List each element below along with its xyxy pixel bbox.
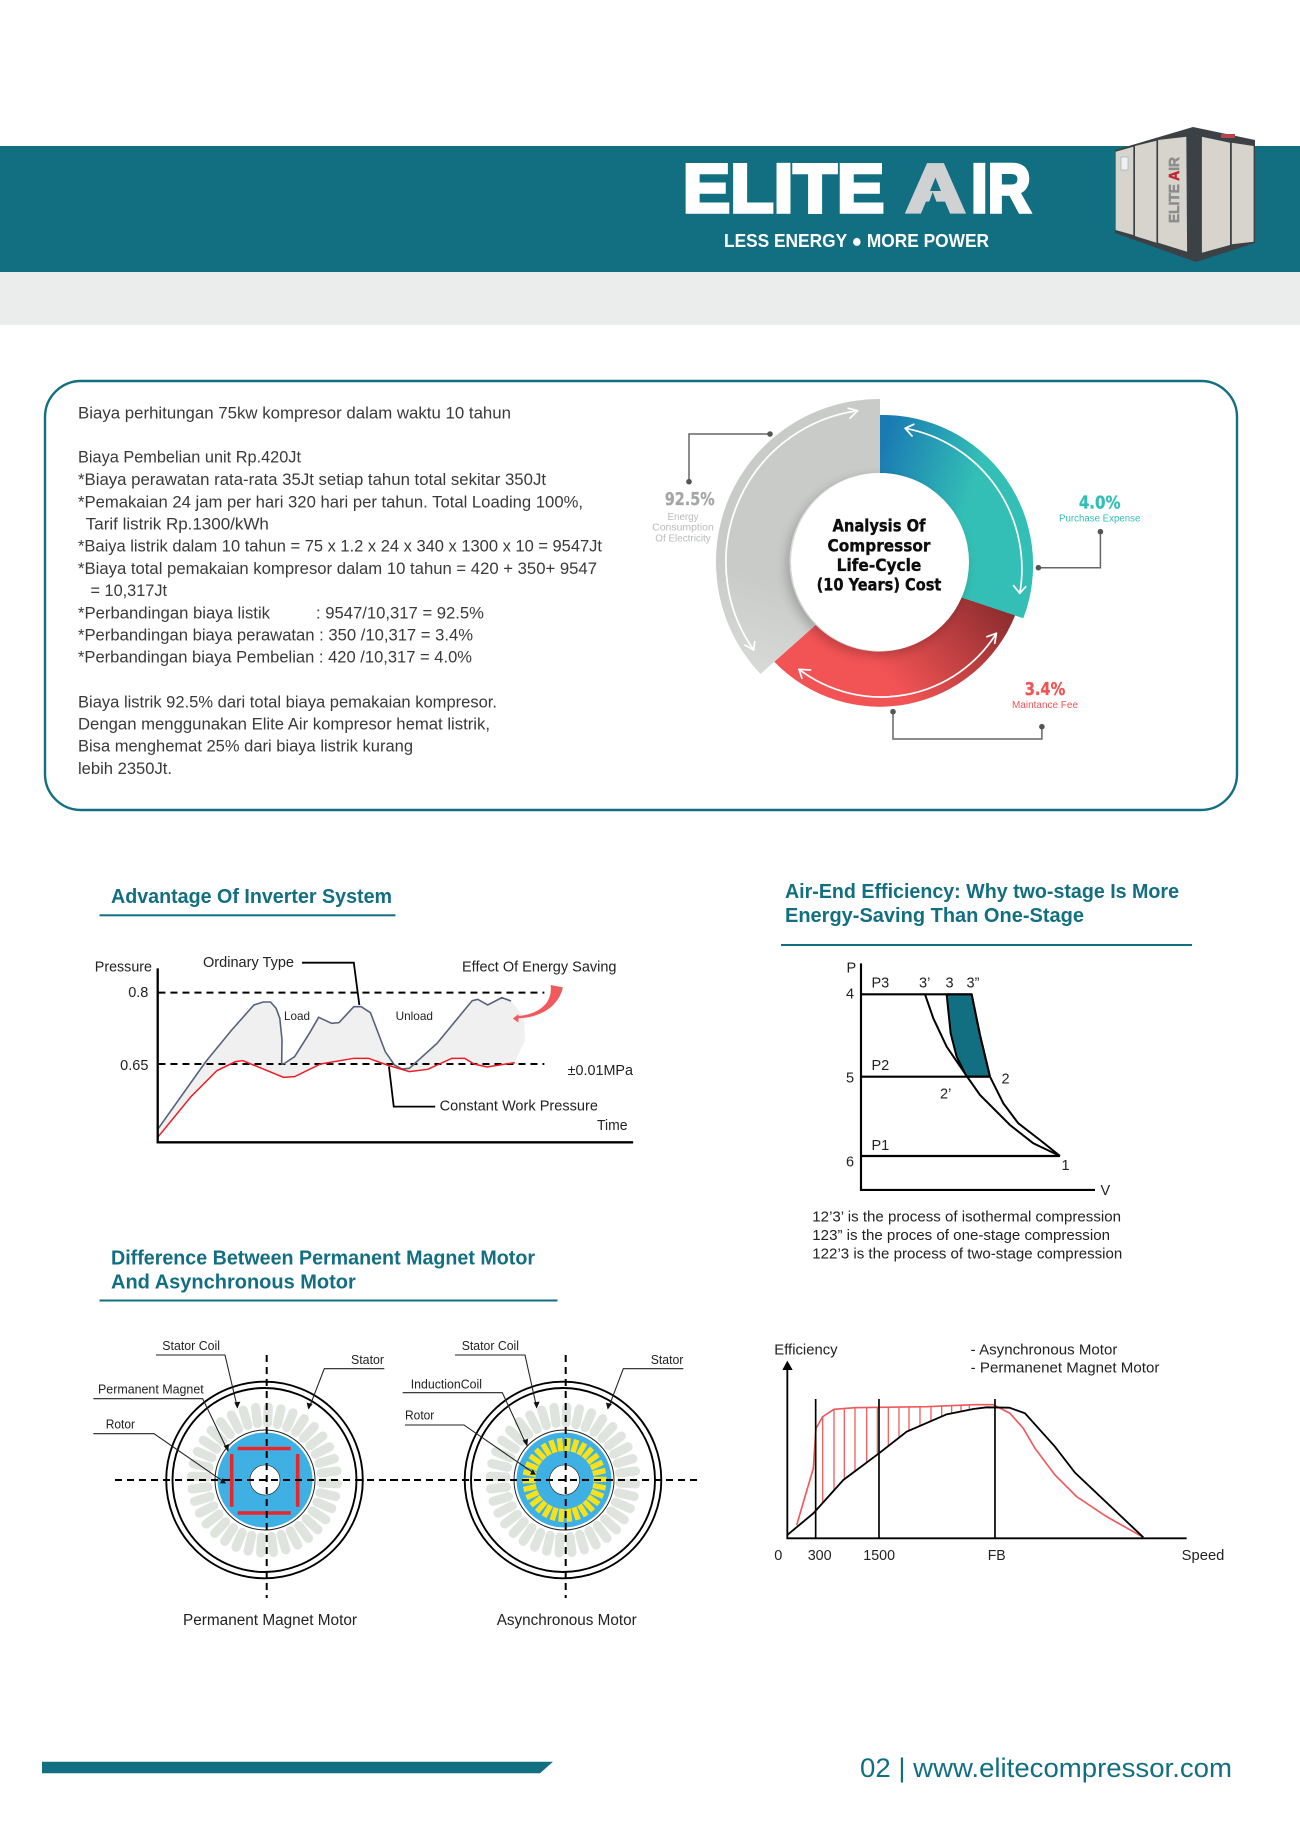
chart labels: Constant Work Pressure — [440, 1099, 598, 1115]
callout: electricity: 92.5% — [665, 489, 715, 510]
labels: Stator Coil — [462, 1338, 519, 1353]
leader lines — [93, 1355, 384, 1483]
labels: Rotor — [405, 1407, 435, 1422]
labels: InductionCoil — [411, 1376, 482, 1391]
diagram labels: 3’ — [919, 976, 930, 992]
chart labels — [95, 955, 634, 1134]
diagram labels: 4 — [846, 986, 854, 1002]
chart labels: Speed — [1182, 1548, 1224, 1564]
stator coils — [486, 1403, 640, 1557]
diagram labels: 6 — [846, 1154, 854, 1170]
diagram labels: 3” — [966, 976, 980, 992]
diagram notes — [812, 1210, 1122, 1262]
teal band — [0, 146, 1300, 272]
text block: cost calculation: *Perbandingan biaya listik — [78, 604, 271, 622]
diagram notes: 12’3’ is the process of isothermal compression — [812, 1210, 1121, 1226]
diagram labels: 2 — [1002, 1072, 1010, 1088]
callout: purchase — [1036, 492, 1141, 570]
chart labels: FB — [988, 1548, 1006, 1564]
header banner — [0, 127, 1300, 325]
text block: cost calculation — [78, 404, 603, 778]
chart labels: Time — [597, 1118, 628, 1134]
text block: cost calculation: *Pemakaian 24 jam per hari 320 hari per tahun. Total Loading 100%, — [78, 493, 583, 511]
center title: Compressor — [828, 537, 931, 556]
induction coil bars — [519, 1435, 610, 1525]
logo: Elite Air — [683, 150, 1031, 227]
segment: maintenance — [774, 597, 1015, 707]
heading: air-end efficiency — [781, 881, 1192, 946]
chart labels — [774, 1342, 1224, 1564]
stator rings — [166, 1382, 363, 1578]
callout: purchase: Purchase Expense — [1059, 514, 1141, 525]
heading: motor difference: Difference Between Permanent Magnet Motor — [111, 1248, 535, 1270]
callout: electricity: Consumption — [652, 523, 714, 534]
text block: cost calculation: Dengan menggunakan Elite Air kompresor hemat listrik, — [78, 715, 490, 733]
caption: Asynchronous Motor — [497, 1612, 637, 1629]
permanent magnets — [232, 1448, 298, 1513]
diagram: asynchronous motor — [390, 1338, 698, 1629]
hatch and curves — [782, 1361, 1187, 1538]
chart labels: Efficiency — [774, 1342, 838, 1358]
text block: cost calculation: lebih 2350Jt. — [78, 760, 172, 778]
callout: electricity: Energy — [668, 512, 698, 523]
center title: Life-Cycle — [837, 556, 921, 575]
chart labels: Effect Of Energy Saving — [462, 960, 616, 976]
diagram: permanent magnet motor — [93, 1338, 413, 1629]
rotor — [215, 1430, 315, 1530]
diagram notes: 123” is the proces of one-stage compression — [812, 1228, 1110, 1244]
segment: purchase — [880, 415, 1033, 618]
text block: cost calculation: = 10,317Jt — [90, 582, 167, 600]
tagline: LESS ENERGY ● MORE POWER — [724, 230, 989, 251]
text block: cost calculation: Biaya perhitungan 75kw kompresor dalam waktu 10 tahun — [78, 404, 511, 422]
diagram labels: P1 — [872, 1138, 889, 1154]
diagram labels — [846, 960, 1110, 1199]
plot curves — [158, 963, 633, 1142]
text block: cost calculation: *Biaya perawatan rata-rata 35Jt setiap tahun total sekitar 350Jt — [78, 471, 547, 489]
labels — [405, 1338, 684, 1422]
callout: purchase: 4.0% — [1079, 492, 1121, 513]
grey strip — [0, 272, 1300, 325]
text block: cost calculation: *Perbandingan biaya perawatan : 350 /10,317 = 3.4% — [78, 627, 473, 645]
chart labels: Unload — [396, 1009, 433, 1023]
diagram labels: P — [846, 960, 856, 976]
chart labels: 1500 — [863, 1548, 895, 1564]
labels: Stator — [351, 1352, 385, 1367]
diagram labels: P3 — [872, 976, 889, 992]
diagram labels: P2 — [872, 1058, 889, 1074]
stator rings — [465, 1382, 661, 1578]
rotor — [514, 1430, 614, 1530]
heading: motor difference — [100, 1248, 558, 1302]
chart labels: - Asynchronous Motor — [971, 1342, 1118, 1358]
center title: Analysis Of — [832, 517, 926, 536]
footer — [42, 1753, 1232, 1783]
callout: maintenance: 3.4% — [1025, 679, 1065, 700]
stator coils — [188, 1403, 341, 1557]
text block: cost calculation: Bisa menghemat 25% dari biaya listrik kurang — [78, 738, 413, 756]
logo: Elite Air: ELITE — [683, 150, 884, 227]
callout: maintenance — [890, 679, 1078, 739]
footer bar — [42, 1762, 553, 1773]
panel: life-cycle cost — [45, 381, 1237, 810]
center title: (10 Years) Cost — [817, 576, 941, 595]
chart: P-V diagram — [812, 960, 1122, 1262]
callout: electricity — [652, 431, 773, 545]
center circle — [791, 473, 969, 651]
heading: inverter system: Advantage Of Inverter System — [111, 886, 392, 908]
callout: electricity: Of Electricity — [655, 534, 711, 545]
center shadow — [786, 476, 966, 656]
labels: Stator — [651, 1352, 684, 1367]
labels: Rotor — [106, 1416, 136, 1431]
logo: Elite Air: A — [906, 150, 966, 227]
text block: cost calculation: : 9547/10,317 = 92.5% — [316, 604, 484, 622]
chart labels: 0 — [774, 1548, 782, 1564]
text block: cost calculation: *Biaya total pemakaian kompresor dalam 10 tahun = 420 + 350+ 9547 — [78, 560, 597, 578]
white arc arrows — [726, 408, 1026, 697]
icon: compressor cabinet — [1115, 127, 1255, 262]
chart labels: Ordinary Type — [203, 955, 294, 971]
labels — [98, 1338, 385, 1431]
caption: Permanent Magnet Motor — [183, 1612, 357, 1629]
text block: cost calculation: Tarif listrik Rp.1300/kWh — [86, 515, 269, 533]
chart: efficiency vs speed — [774, 1342, 1224, 1564]
panel border — [45, 381, 1237, 810]
icon: compressor cabinet: ELITE AIR — [1166, 157, 1183, 223]
segment: electricity — [716, 399, 880, 674]
diagram lines — [861, 963, 1095, 1190]
chart labels: 0.65 — [120, 1058, 148, 1074]
diagram labels: 2’ — [940, 1086, 951, 1102]
heading: air-end efficiency: Energy-Saving Than One-Stage — [785, 905, 1084, 927]
callout: maintenance: Maintance Fee — [1012, 700, 1078, 711]
centre axes — [115, 1355, 413, 1598]
diagram labels: 5 — [846, 1070, 854, 1086]
diagram labels: 1 — [1062, 1158, 1070, 1174]
centre axes — [390, 1355, 698, 1598]
text block: cost calculation: Biaya listrik 92.5% dari total biaya pemakaian kompresor. — [78, 693, 497, 711]
chart labels: Pressure — [95, 960, 152, 976]
center title — [817, 517, 941, 595]
diagram labels: 3 — [946, 976, 954, 992]
text block: cost calculation: Biaya Pembelian unit Rp.420Jt — [78, 449, 301, 467]
chart labels: ±0.01MPa — [568, 1063, 634, 1079]
text block: cost calculation: *Perbandingan biaya Pembelian : 420 /10,317 = 4.0% — [78, 649, 472, 667]
text block: cost calculation: *Baiya listrik dalam 10 tahun = 75 x 1.2 x 24 x 340 x 1300 x 10 = 9547Jt — [78, 538, 603, 556]
heading: air-end efficiency: Air-End Efficiency: Why two-stage Is More — [785, 881, 1179, 903]
chart labels: Load — [284, 1009, 310, 1023]
diagram labels: V — [1100, 1183, 1110, 1199]
chart: inverter pressure — [95, 955, 634, 1142]
chart labels: 0.8 — [128, 985, 148, 1001]
diagram notes: 122’3 is the process of two-stage compression — [812, 1246, 1122, 1262]
labels: Stator Coil — [162, 1338, 220, 1353]
leader lines — [403, 1355, 683, 1475]
logo: Elite Air: IR — [971, 150, 1031, 227]
chart labels: - Permanenet Magnet Motor — [971, 1360, 1160, 1376]
heading: motor difference: And Asynchronous Motor — [111, 1272, 356, 1294]
footer url: 02 | www.elitecompressor.com — [860, 1753, 1232, 1783]
chart: donut cost analysis — [652, 399, 1141, 739]
labels: Permanent Magnet — [98, 1381, 204, 1396]
chart labels: 300 — [808, 1548, 832, 1564]
